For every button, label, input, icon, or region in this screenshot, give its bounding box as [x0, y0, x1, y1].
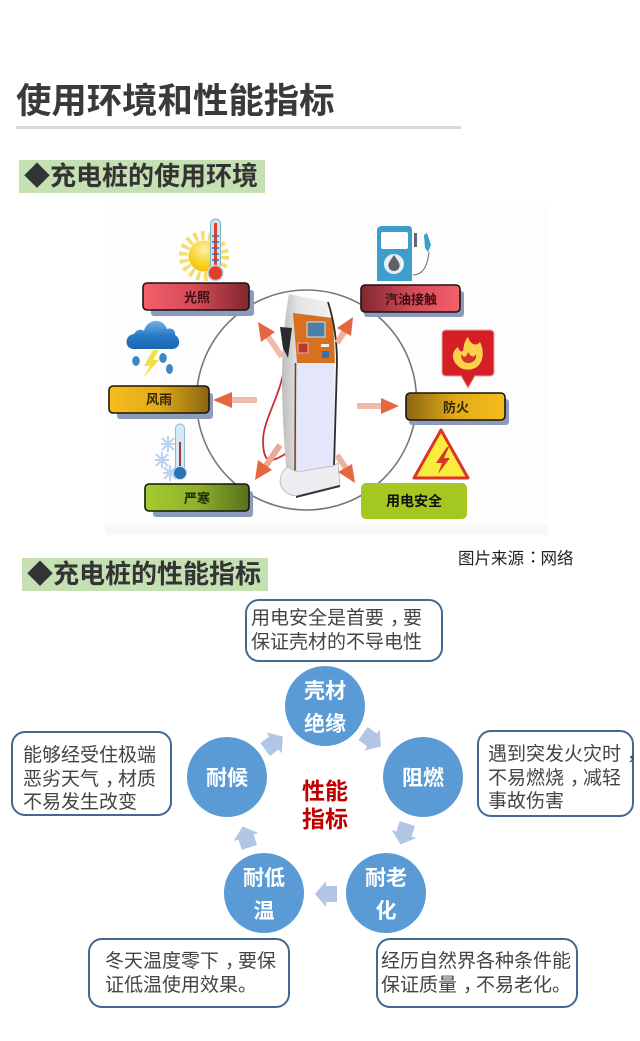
icon: snow thermometer	[155, 424, 186, 481]
text box: shell	[245, 599, 443, 662]
icon: fuel pump	[377, 226, 431, 281]
ring	[196, 290, 416, 510]
label: fire prevention: 防火	[443, 400, 469, 415]
title: 使用环境和性能指标	[16, 81, 335, 121]
label: electrical safety	[361, 483, 467, 519]
text box: flame: 不易燃烧 ，减轻	[488, 768, 621, 788]
text box: flame	[477, 730, 634, 817]
text box: shell: 用电安全是首要 ，要	[251, 608, 422, 629]
circle: aging resistance	[346, 853, 426, 933]
heading: performance indicators: ◆充电桩的性能指标	[27, 559, 261, 589]
circle: weather resistance: 耐候	[206, 767, 248, 790]
circle: shell insulation	[285, 666, 365, 746]
text box: cold: 证低温使用效果。	[105, 975, 257, 996]
center label: 性能	[302, 778, 348, 804]
circle: aging resistance: 化	[376, 900, 396, 922]
text box: flame: 事故伤害	[488, 791, 564, 812]
circle: low temperature resistance: 温	[254, 900, 274, 922]
charging pile	[263, 294, 340, 498]
label: severe cold: 严寒	[184, 491, 210, 506]
icon: storm cloud	[126, 321, 179, 378]
circle: flame retardant	[383, 737, 463, 817]
center label	[302, 778, 348, 832]
text box: weather: 不易发生改变	[23, 792, 137, 813]
label: electrical safety: 用电安全	[386, 493, 442, 509]
label: wind and rain	[109, 386, 213, 419]
label: fire prevention	[406, 393, 509, 425]
text box: cold	[88, 938, 290, 1008]
text box: cold: 冬天温度零下 ，要保	[105, 951, 276, 972]
circle: shell insulation: 壳材	[304, 680, 346, 702]
label: severe cold	[145, 484, 253, 517]
text box: aging	[376, 938, 578, 1008]
text box: aging: 保证质量 ，不易老化。	[381, 975, 571, 996]
text box: weather	[11, 731, 172, 816]
text box: shell: 保证壳材的不导电性	[251, 632, 422, 653]
arrows around pile	[213, 317, 399, 483]
image source: 图片来源 ：网络	[458, 548, 574, 568]
label: wind and rain: 风雨	[146, 392, 172, 407]
label: gasoline contact: 汽油接触	[385, 292, 437, 307]
circle: weather resistance	[187, 737, 267, 817]
circle: flame retardant: 阻燃	[402, 767, 444, 790]
label: sunlight: 光照	[184, 290, 210, 305]
text box: weather: 恶劣天气 ，材质	[23, 768, 156, 790]
text box: weather: 能够经受住极端	[23, 745, 156, 766]
circle: aging resistance: 耐老	[365, 866, 407, 890]
circle: shell insulation: 绝缘	[304, 712, 346, 736]
text box: aging: 经历自然界各种条件能	[381, 951, 571, 972]
icon: fire marker	[442, 330, 494, 388]
center label: 指标	[302, 806, 348, 832]
heading: usage environment: ◆充电桩的使用环境	[24, 161, 258, 191]
icon: electric warning	[414, 430, 468, 478]
circle: low temperature resistance: 耐低	[243, 866, 285, 890]
label: sunlight	[143, 283, 254, 316]
icon: sun thermometer	[184, 219, 224, 280]
label: gasoline contact	[361, 285, 464, 317]
circle: low temperature resistance	[224, 853, 304, 933]
